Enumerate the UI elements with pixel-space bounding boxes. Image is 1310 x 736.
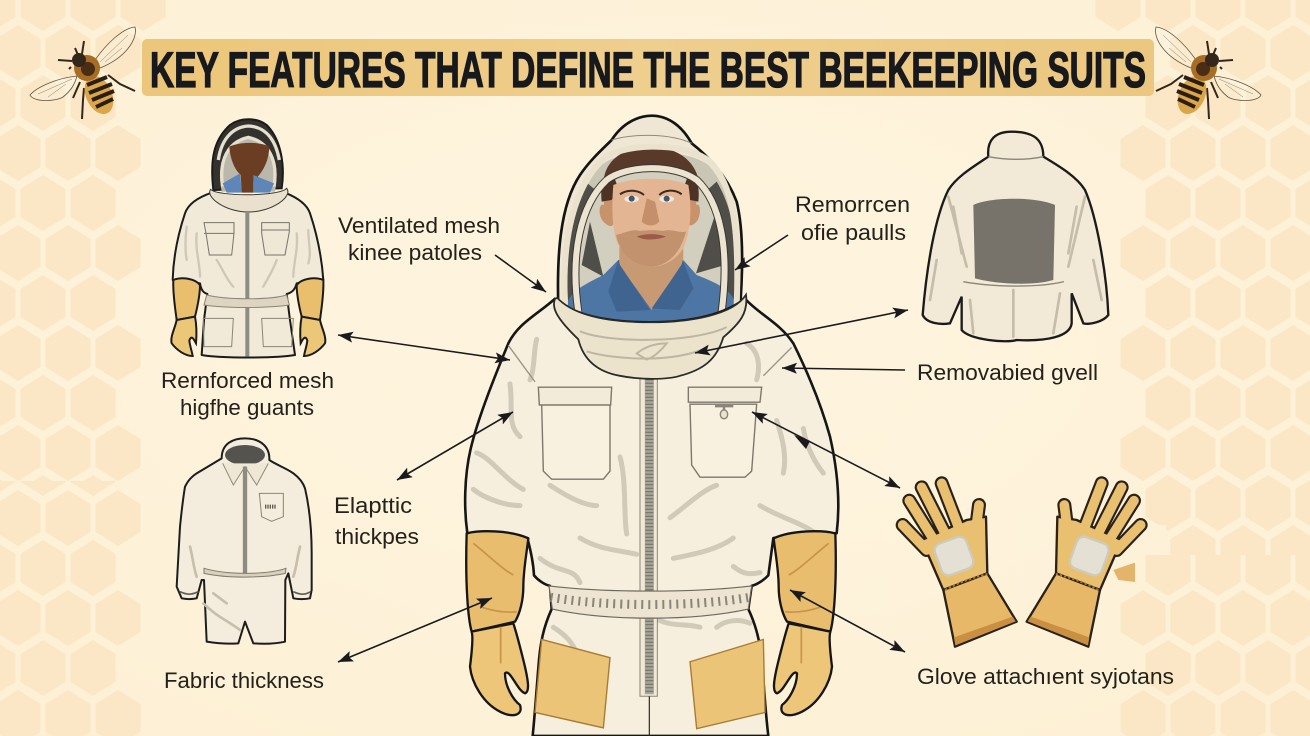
cowl folds [580, 327, 727, 360]
label: elastic: thickpes [335, 524, 419, 549]
left thigh pocket [535, 639, 610, 728]
arrow: top right label to veil [735, 235, 788, 270]
arrow: ventilated mesh to hood [495, 255, 546, 292]
label: remorrcen: ofie paulls [801, 220, 906, 245]
outer rim [564, 147, 737, 305]
main figure: suit [465, 295, 838, 736]
label: glove attachment: Glove attachıent syjotans [917, 664, 1174, 689]
left glove on figure [466, 531, 528, 715]
left chest pocket [538, 387, 612, 479]
pair of gloves with wrist patches [903, 483, 1141, 647]
hood, veil and man's head [558, 116, 742, 322]
elastic waistband [549, 586, 752, 618]
label: elastic: Elapttic [334, 493, 412, 518]
arrow: cowl to back jacket [695, 310, 908, 353]
label: fabric thickness: Fabric thickness [164, 668, 324, 693]
right thigh pocket [690, 639, 765, 729]
label: removable: Removabied gvell [917, 360, 1098, 385]
ears and hair fringe [600, 180, 700, 226]
face [612, 179, 690, 267]
right glove on figure [774, 531, 836, 715]
title banner [142, 39, 1154, 98]
arrow: shoulder to small suit [338, 335, 510, 360]
veil mesh [567, 147, 738, 312]
arrow: sleeve to elastic label [397, 412, 513, 480]
left glove [903, 483, 1017, 647]
hood cowl collar [554, 295, 746, 379]
honeycomb background: right [1095, 0, 1310, 736]
honeycomb background: left [0, 0, 168, 736]
shirt collar [608, 260, 693, 312]
small suit front view [171, 119, 325, 357]
arrow: pocket to gloves [752, 412, 900, 488]
hood dome [558, 116, 742, 308]
arrow: glove to attachment label [790, 590, 905, 652]
label: ventilated mesh: kinee patoles [348, 240, 482, 265]
back view jacket with mesh panel [923, 132, 1108, 341]
arrow: removable label to sleeve [782, 368, 905, 370]
right chest pocket [688, 387, 762, 477]
icon: bee left [30, 27, 135, 119]
suit fabric folds [473, 339, 823, 660]
icon: bee right [1156, 27, 1261, 119]
hoop [575, 168, 725, 312]
label: remorrcen: Remorrcen [795, 192, 910, 217]
centre zipper [640, 376, 657, 736]
label: reinforced mesh: Rernforced mesh [161, 368, 334, 393]
label: reinforced mesh: higfhe guants [180, 395, 314, 420]
right glove [1027, 483, 1141, 647]
shoulder seams [508, 345, 792, 382]
neck [619, 245, 683, 310]
shirt [567, 260, 737, 322]
small jacket front view [177, 438, 312, 644]
label: ventilated mesh: Ventilated mesh [338, 213, 500, 238]
arrow: glove to fabric thickness [338, 598, 492, 662]
suit body [465, 299, 838, 736]
